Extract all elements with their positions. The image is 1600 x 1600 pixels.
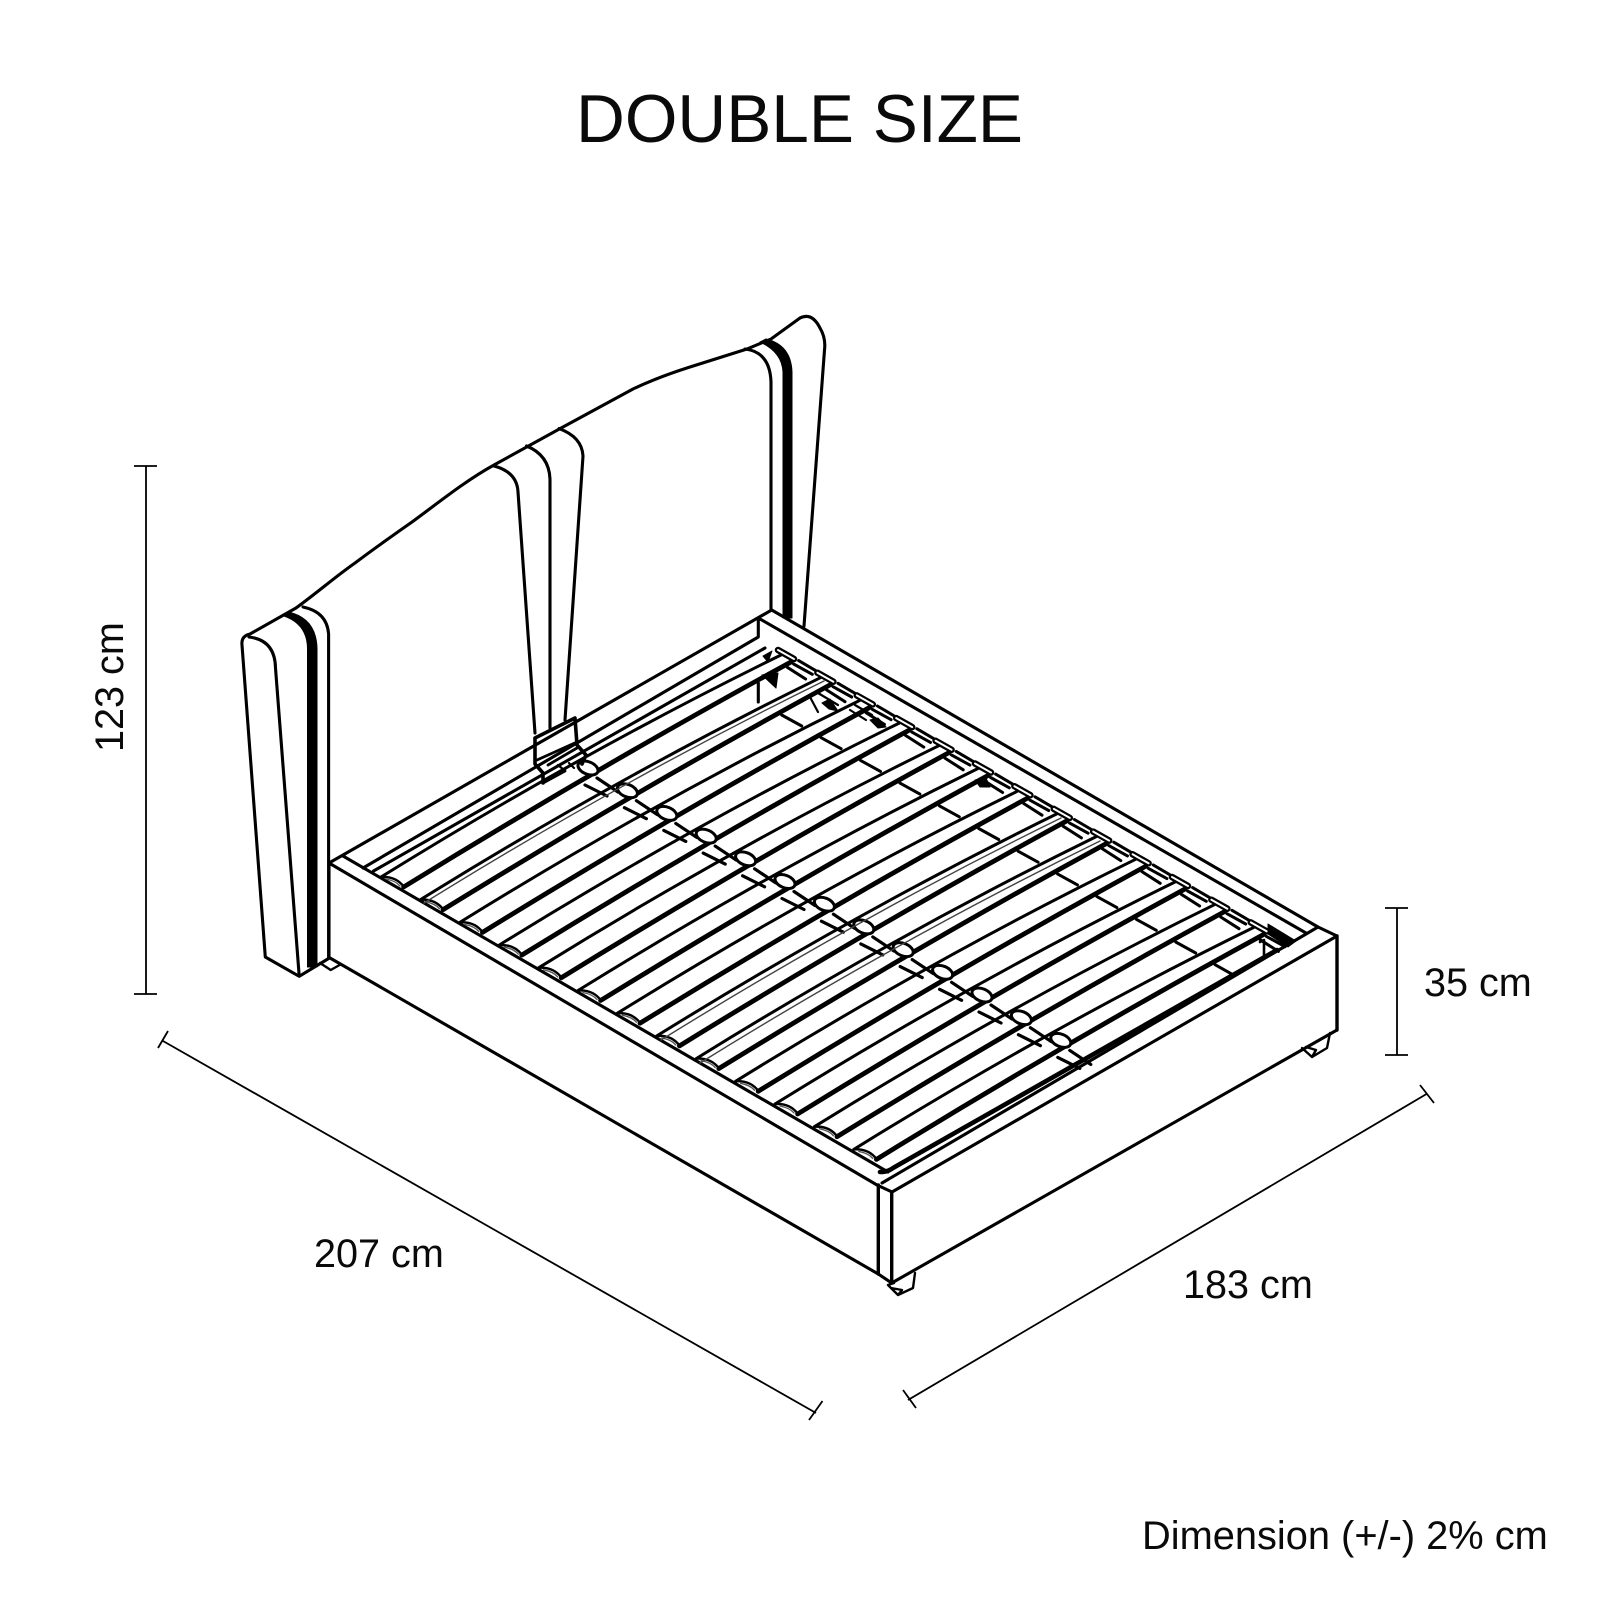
centre pleat xyxy=(494,429,583,733)
left post xyxy=(327,863,331,958)
lift mechanism details xyxy=(762,651,1296,947)
bottom edges xyxy=(330,958,1337,1283)
headboard top edge xyxy=(296,318,800,608)
headboard xyxy=(242,316,825,976)
right wing inner edge xyxy=(745,349,771,609)
last slat at foot xyxy=(880,950,1277,1172)
foot: right xyxy=(1302,1033,1330,1057)
dimension: length 207 cm xyxy=(158,1031,822,1420)
label: 123 cm: 123 cm xyxy=(88,622,132,752)
left wing outline xyxy=(242,608,329,976)
foot: front xyxy=(888,1273,915,1295)
lift rail cross lines xyxy=(782,715,1231,974)
label: 35 cm: 35 cm xyxy=(1424,961,1532,1005)
right corner edge xyxy=(1335,936,1339,1030)
mattress slats xyxy=(381,650,1296,1172)
dimension: width 183 cm xyxy=(903,1085,1434,1408)
right wing dark band xyxy=(760,339,792,618)
near side inner rim xyxy=(343,856,888,1172)
foot: left xyxy=(320,963,340,970)
double lines on slats xyxy=(424,681,1100,1063)
right wing outline xyxy=(800,316,825,626)
lift bracket xyxy=(535,718,586,783)
tolerance note: Dimension (+/-) 2% cm xyxy=(1142,1514,1548,1558)
label: 183 cm: 183 cm xyxy=(1183,1263,1313,1307)
label: 207 cm: 207 cm xyxy=(314,1232,444,1276)
left wing dark band xyxy=(284,612,317,967)
dimension: height 123 cm xyxy=(88,466,157,994)
head rail inner lines xyxy=(363,618,765,871)
top rim outline xyxy=(329,610,1337,1192)
bed drawing xyxy=(242,316,1337,1295)
mechanism linkage xyxy=(810,693,872,720)
bed base frame xyxy=(320,610,1337,1295)
title: DOUBLE SIZE xyxy=(576,82,1023,157)
foot inner rim xyxy=(882,927,1318,1183)
corner box xyxy=(1260,940,1264,957)
left wing front edge xyxy=(303,607,329,958)
left wing inner panel xyxy=(249,637,299,976)
front corner post xyxy=(878,1185,892,1283)
dimension: base height 35 cm xyxy=(1385,908,1532,1055)
far side inner rim xyxy=(758,618,1306,933)
